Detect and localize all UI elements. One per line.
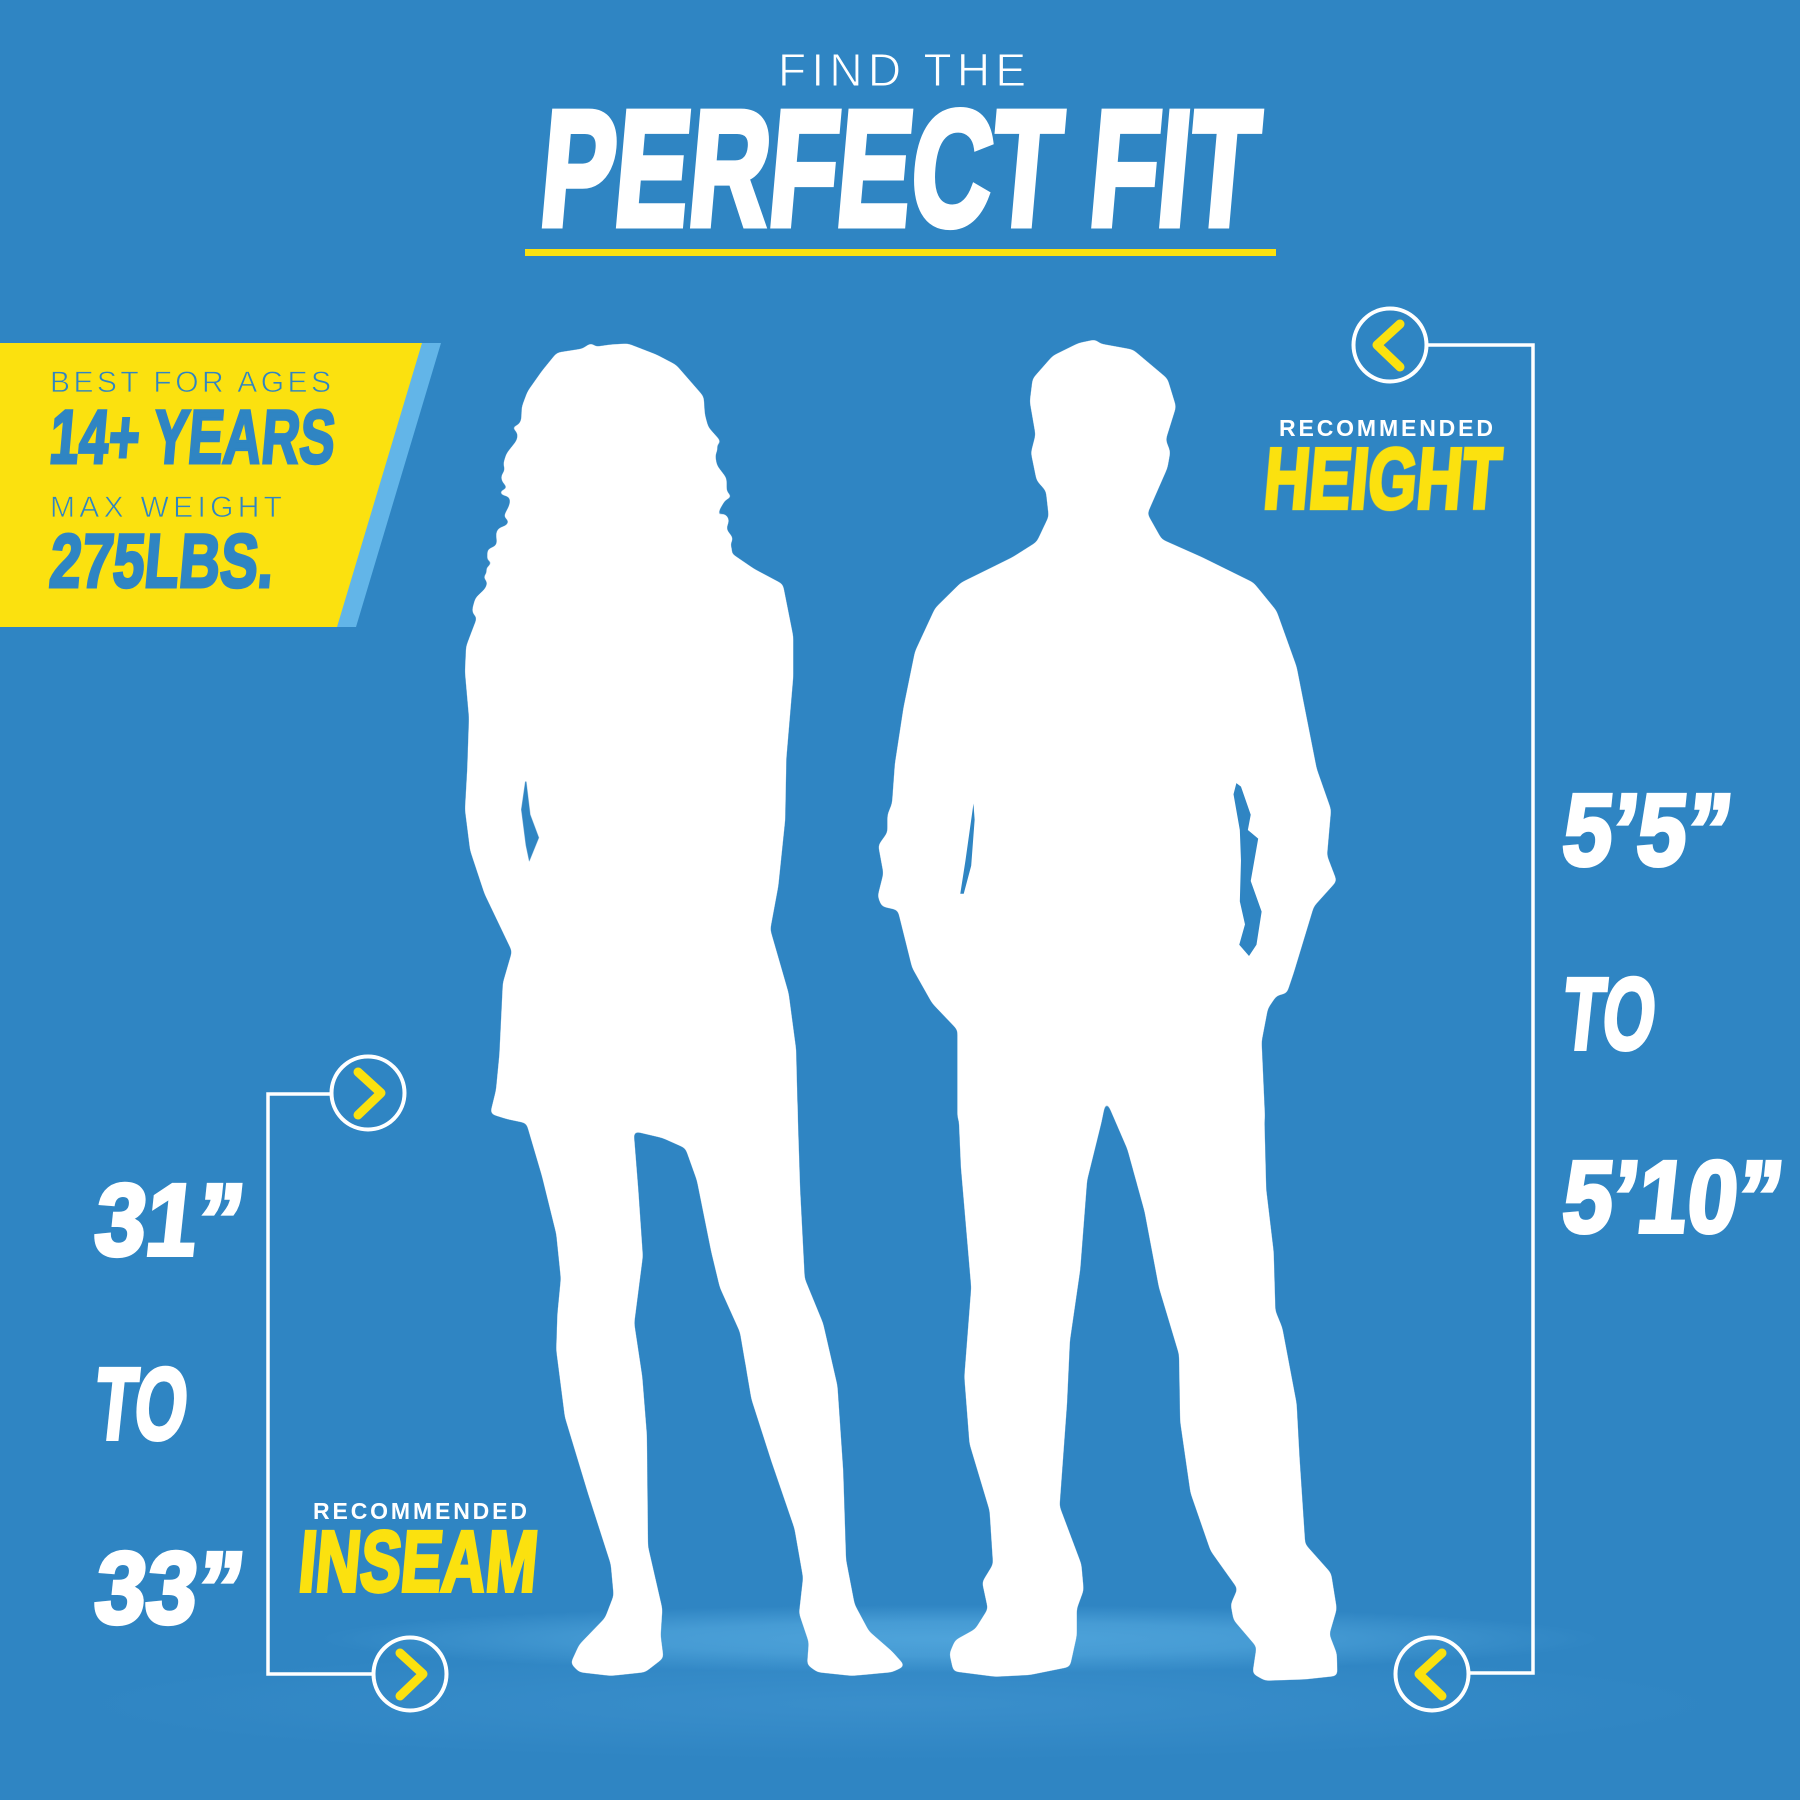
- title: [525, 44, 1276, 260]
- inseam values: [90, 1162, 250, 1645]
- title: perfect fit: PERFECT FIT: [534, 76, 1266, 260]
- value: 275 lbs: 275LBS.: [47, 519, 278, 604]
- inseam word: INSEAM: [295, 1514, 542, 1610]
- icon: top chevron circle: [1354, 308, 1426, 382]
- heading: recommended inseam: [295, 1498, 542, 1610]
- woman arm gap: [521, 782, 539, 862]
- value: to: TO: [1558, 956, 1662, 1071]
- man arm gaps: [960, 783, 1262, 956]
- heading: recommended height: [1260, 415, 1505, 527]
- title: find the: FIND THE: [778, 44, 1026, 96]
- inseam bracket: [268, 1056, 446, 1710]
- icon: top chevron circle: [332, 1056, 404, 1130]
- value: 14+ years: 14+ YEARS: [47, 395, 339, 480]
- man legs: [949, 1100, 1337, 1681]
- value: 33": 33”: [90, 1530, 250, 1645]
- inseam bracket line: [268, 1094, 373, 1674]
- man upper body: [878, 339, 1337, 1119]
- height values: [1558, 772, 1789, 1254]
- woman upper body: [465, 342, 798, 1119]
- silhouette: woman: [465, 342, 905, 1676]
- panel accent: [320, 343, 441, 627]
- label: best for ages: BEST FOR AGES: [50, 366, 331, 399]
- height overline: RECOMMENDED: [1279, 415, 1493, 441]
- value: 5'5": 5’5”: [1558, 772, 1738, 887]
- panel: age and weight: [0, 343, 441, 627]
- title underline: [525, 249, 1276, 256]
- icon: bottom chevron circle: [1396, 1638, 1468, 1710]
- woman legs: [491, 1100, 905, 1676]
- value: 31": 31”: [90, 1162, 250, 1277]
- silhouette: man: [878, 339, 1337, 1681]
- inseam overline: RECOMMENDED: [313, 1498, 527, 1524]
- height word: HEIGHT: [1260, 431, 1505, 527]
- icon: bottom chevron circle: [374, 1638, 446, 1710]
- value: to: TO: [90, 1346, 194, 1461]
- label: max weight: MAX WEIGHT: [50, 491, 282, 524]
- height bracket line: [1428, 345, 1533, 1673]
- panel background: [0, 343, 422, 627]
- height bracket: [1354, 308, 1533, 1710]
